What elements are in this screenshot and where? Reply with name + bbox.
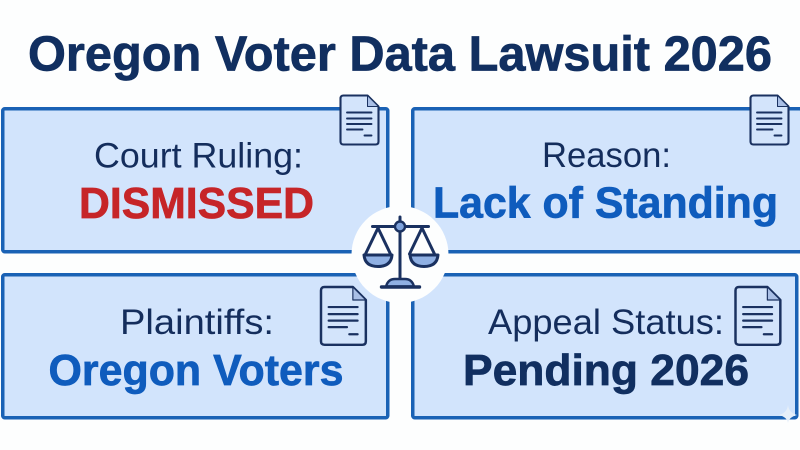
- value: dismissed: DISMISSED: [79, 179, 314, 228]
- panel: court ruling: [3, 96, 388, 252]
- icon: scales: [364, 217, 438, 287]
- icon: document: [340, 96, 378, 144]
- label: court ruling: Court Ruling:: [94, 136, 303, 176]
- label: plaintiffs: Plaintiffs:: [120, 303, 274, 342]
- value: lack of standing: Lack of Standing: [433, 178, 778, 228]
- panel: plaintiffs: [3, 275, 388, 418]
- icon: document: [736, 287, 780, 345]
- icon: document: [750, 96, 788, 144]
- panel: appeal status: [413, 275, 797, 423]
- label: appeal status: Appeal Status:: [488, 303, 724, 342]
- central emblem: scales of justice: [352, 206, 448, 303]
- panel: reason: [413, 96, 800, 252]
- title: Oregon Voter Data Lawsuit 2026: [28, 28, 772, 82]
- icon: document: [321, 287, 366, 345]
- watermark sparkle: [779, 405, 797, 423]
- value: pending 2026: Pending 2026: [463, 346, 749, 395]
- label: reason: Reason:: [542, 136, 671, 175]
- value: oregon voters: Oregon Voters: [48, 346, 344, 395]
